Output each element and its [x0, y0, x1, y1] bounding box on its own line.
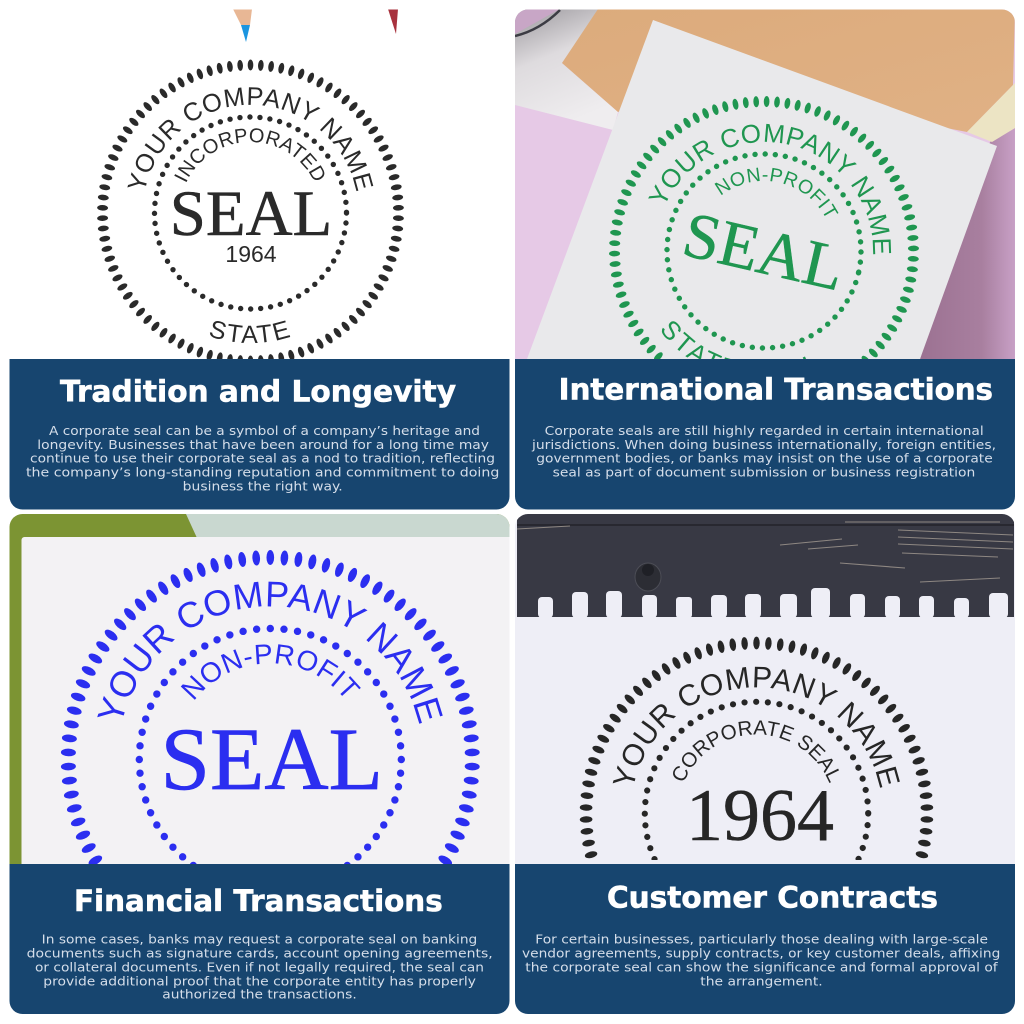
- body text: In some cases, banks may request a corporate seal on banking: [42, 932, 477, 947]
- dark wood with notched paper edge: [517, 514, 1014, 618]
- caption band: [515, 864, 1015, 1015]
- panel: Tradition and Longevity: [10, 10, 510, 510]
- seal year: 1964: [225, 241, 277, 267]
- pale fabric at top right: [186, 514, 510, 538]
- seal text: company name: YOUR COMPANY NAME: [97, 582, 443, 724]
- seal text: corporate seal: CORPORATE SEAL: [673, 720, 839, 783]
- body text: the corporate seal can show the significance and formal approval of: [525, 959, 998, 974]
- body text: vendor agreements, supply contracts, or key customer deals, affixing: [522, 945, 1000, 960]
- inner dotted ring: [154, 117, 346, 309]
- body text: the company’s long-standing reputation and commitment to doing: [26, 465, 499, 480]
- body text: documents such as signature cards, account opening agreements,: [27, 945, 493, 960]
- seal year: 1964: [686, 775, 834, 857]
- wood knot and grain: [517, 522, 1014, 591]
- body text: authorized the transactions.: [162, 987, 357, 1002]
- seal word: SEAL: [170, 178, 332, 250]
- heading: Financial Transactions: [74, 884, 443, 918]
- seal text: company name: YOUR COMPANY NAME: [648, 124, 892, 254]
- outer dotted ring: [512, 593, 978, 1024]
- body text: [26, 423, 499, 494]
- seal text: state: STATE SEAL: [662, 321, 806, 359]
- seal: green non-profit: [609, 96, 919, 359]
- body text: seal as part of document submission or business registration: [553, 465, 975, 480]
- cream card: [967, 83, 1015, 142]
- paper strip hiding seal above the band: [515, 860, 1015, 865]
- panel: Financial Transactions: [10, 514, 510, 1014]
- body text: continue to use their corporate seal as a nod to tradition, reflecting: [30, 451, 495, 466]
- icon: glasses at corner: [515, 9, 560, 36]
- seal: black corporate: [580, 636, 934, 860]
- white paper sheet: [22, 537, 522, 877]
- inner dotted ring: [664, 151, 864, 351]
- caption band: [10, 864, 510, 1015]
- body text: government bodies, or banks may insist on the use of a corporate: [536, 451, 993, 466]
- body text: business the right way.: [183, 479, 343, 494]
- photo background: white desk: [10, 10, 510, 360]
- seal: blue non-profit: [60, 550, 480, 864]
- body text: [531, 423, 996, 480]
- panel: International Transactions: [515, 10, 1015, 510]
- seal word: SEAL: [161, 711, 383, 809]
- white paper at top left: [515, 9, 618, 130]
- photo background: green fabric: [10, 514, 510, 864]
- heading: Customer Contracts: [607, 881, 938, 915]
- outer dotted ring: [60, 550, 480, 864]
- heading: International Transactions: [559, 372, 993, 406]
- icon: blue pencil: [233, 9, 252, 42]
- photo background: white paper: [515, 514, 1015, 864]
- body text: jurisdictions. When doing business internationally, foreign entities,: [531, 437, 996, 452]
- caption band: [10, 359, 510, 510]
- inner dotted ring: [139, 628, 401, 890]
- body text: [522, 932, 1000, 988]
- body text: the arrangement.: [700, 973, 823, 988]
- body text: A corporate seal can be a symbol of a company’s heritage and: [49, 423, 480, 438]
- seal text: non-profit: NON-PROFIT: [180, 644, 361, 700]
- body text: Corporate seals are still highly regarded in certain international: [545, 423, 984, 438]
- outer dotted ring: [97, 60, 404, 359]
- icon: red pencil: [388, 9, 398, 34]
- white paper sheet: [527, 20, 997, 359]
- seal word: SEAL: [677, 199, 851, 305]
- body text: provide additional proof that the corporate entity has properly: [43, 973, 477, 988]
- caption band: [515, 359, 1015, 510]
- seal text: non-profit: NON-PROFIT: [714, 168, 838, 216]
- seal text: state: STATE: [210, 320, 290, 343]
- seal text: company name: YOUR COMPANY NAME: [612, 666, 900, 788]
- seal: black incorporated: [97, 60, 404, 359]
- body text: [27, 932, 493, 1002]
- seal text: company name: YOUR COMPANY NAME: [127, 87, 374, 192]
- shaded pink at right: [920, 128, 1015, 359]
- inner dotted ring: [645, 702, 868, 925]
- heading: Tradition and Longevity: [60, 374, 456, 408]
- outer dotted ring: [609, 96, 919, 359]
- panel: Customer Contracts: [515, 514, 1015, 1014]
- body text: For certain businesses, particularly those dealing with large-scale: [535, 932, 988, 947]
- seal text: incorporated: INCORPORATED: [174, 128, 324, 182]
- tan envelope: [562, 9, 1015, 132]
- body text: longevity. Businesses that have been around for a long time may: [37, 437, 490, 452]
- body text: or collateral documents. Even if not legally required, the seal can: [35, 959, 484, 974]
- photo background: pink surface: [515, 10, 1015, 360]
